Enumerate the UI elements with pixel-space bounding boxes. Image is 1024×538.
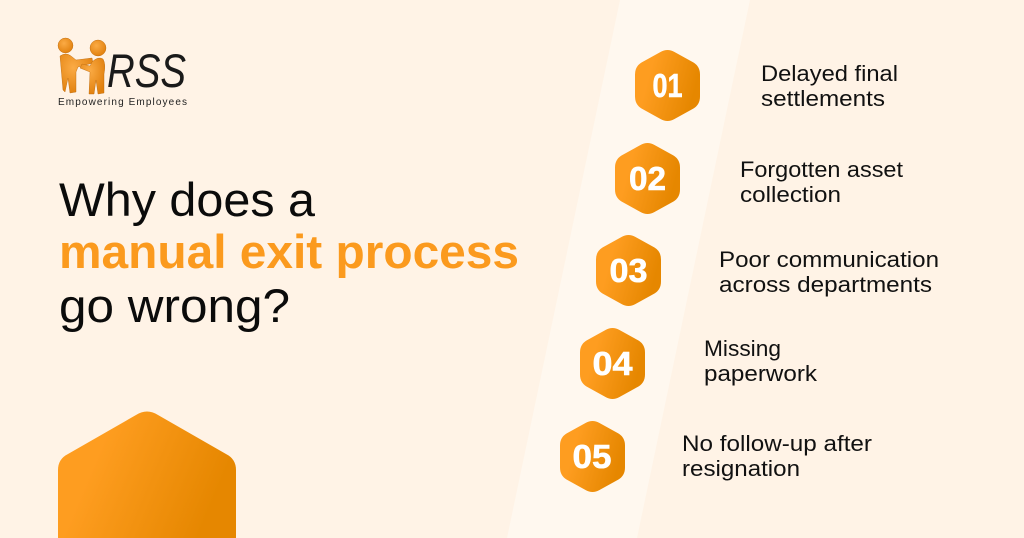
item 03 bbox=[596, 235, 939, 306]
decorative orange hexagon bbox=[58, 412, 236, 538]
badge 05: 05 bbox=[572, 438, 612, 475]
item 02 bbox=[615, 143, 904, 214]
label 01 bbox=[761, 61, 898, 111]
badge 03: 03 bbox=[610, 252, 648, 289]
badge 01: 01 bbox=[652, 67, 682, 104]
label 01: Delayed final bbox=[761, 61, 898, 86]
icon: two figures shaking hands bbox=[58, 38, 106, 94]
label 05: resignation bbox=[682, 456, 800, 481]
logo bbox=[58, 38, 187, 108]
label 02: collection bbox=[740, 182, 841, 207]
label 04 bbox=[704, 336, 818, 386]
logo wordmark: RSS bbox=[107, 44, 186, 97]
label 03: across departments bbox=[719, 272, 932, 297]
badge 04 bbox=[580, 328, 645, 399]
label 05: No follow-up after bbox=[682, 431, 873, 456]
badge 01 bbox=[635, 50, 700, 121]
title: go wrong? bbox=[59, 279, 290, 332]
badge 02 bbox=[615, 143, 680, 214]
item 04 bbox=[580, 328, 818, 399]
label 02: Forgotten asset bbox=[740, 157, 904, 182]
label 04: paperwork bbox=[704, 361, 818, 386]
label 03 bbox=[719, 247, 939, 297]
label 03: Poor communication bbox=[719, 247, 939, 272]
badge 02: 02 bbox=[629, 160, 666, 197]
logo tagline: Empowering Employees bbox=[58, 97, 187, 108]
label 04: Missing bbox=[704, 336, 781, 361]
label 05 bbox=[682, 431, 873, 481]
title highlight: manual exit process bbox=[59, 225, 519, 278]
badge 04: 04 bbox=[592, 345, 633, 382]
item 05 bbox=[560, 421, 873, 492]
diagonal background band bbox=[507, 0, 750, 538]
label 01: settlements bbox=[761, 86, 885, 111]
item 01 bbox=[635, 50, 898, 121]
label 02 bbox=[740, 157, 904, 207]
title: Why does a bbox=[59, 173, 316, 226]
badge 05 bbox=[560, 421, 625, 492]
title bbox=[59, 173, 519, 332]
badge 03 bbox=[596, 235, 661, 306]
